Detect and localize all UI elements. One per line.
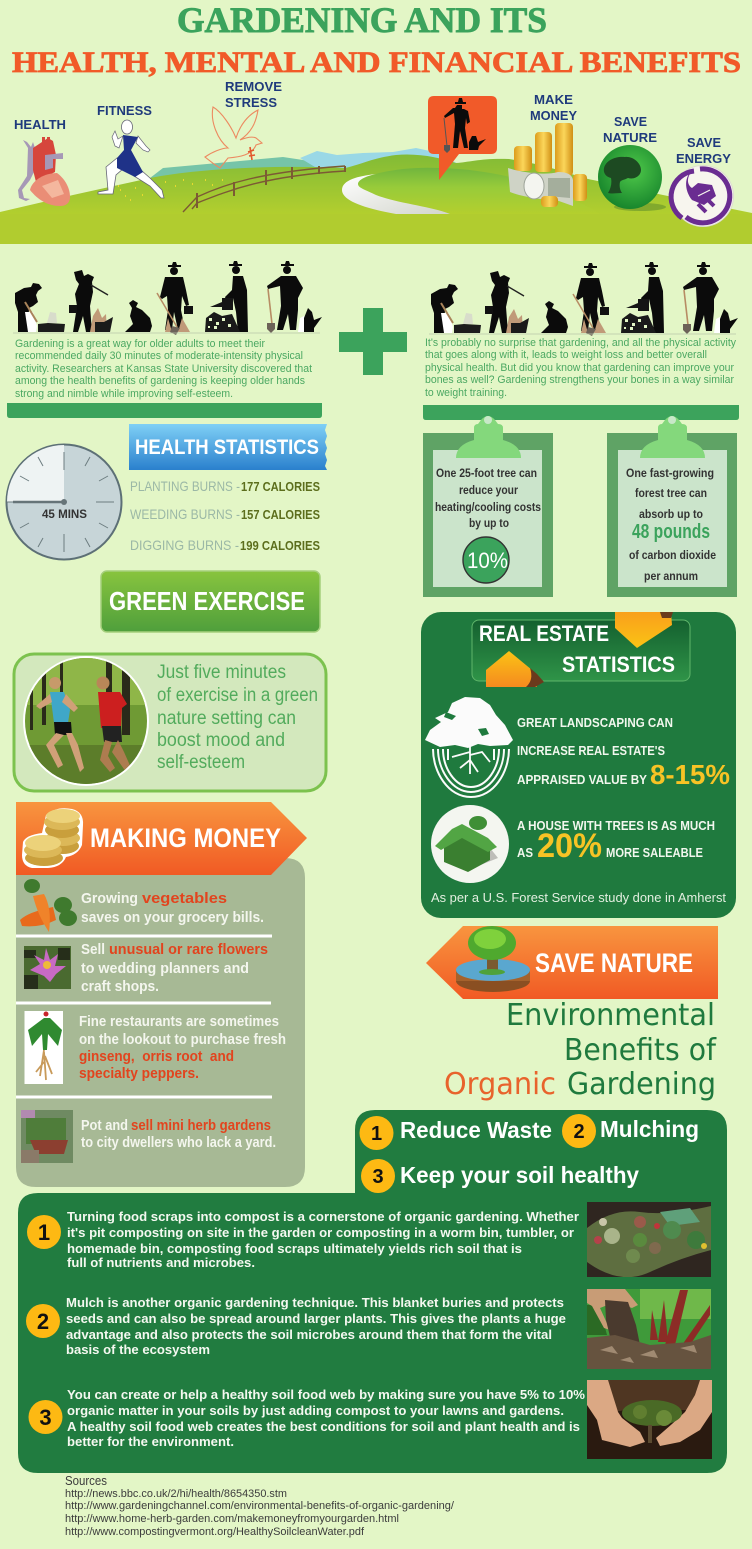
- clock 45 mins: [0, 444, 122, 560]
- text: five minutes: boost mood and: [157, 730, 285, 751]
- hero label: save energy: [676, 135, 731, 166]
- clipboard: carbon dioxide: absorb up to: [639, 507, 703, 521]
- text: five minutes: Just five minutes: [157, 662, 286, 683]
- save nature banner: [426, 926, 718, 999]
- icon: dove: [205, 107, 262, 168]
- step 1: compost: Turning food scraps into compost is a cornerstone of organic gardening. Whether: [67, 1209, 579, 1224]
- icon: green globe with tree: [598, 145, 666, 211]
- clipboard: carbon dioxide: One fast-growing: [626, 466, 714, 480]
- clock 45 mins: 45 MINS: [42, 507, 87, 521]
- clipboard: tree cooling: [423, 416, 553, 597]
- icon: tree on pond: [456, 926, 530, 992]
- sources: http://www.home-herb-garden.com/makemoneyfromyourgarden.html: [65, 1513, 399, 1525]
- summary list: 3: [372, 1166, 384, 1188]
- text: landscaping value: INCREASE REAL ESTATE'S: [517, 743, 665, 758]
- item: rare flowers: craft shops.: [81, 978, 159, 995]
- text: five minutes: [157, 662, 318, 773]
- plus sign: [339, 308, 407, 375]
- paragraph: older adults: [15, 338, 312, 400]
- item: vegetables: Growing: [81, 890, 138, 907]
- heading: environmental benefits of organic gardening: [444, 998, 717, 1102]
- paragraph: older adults: activity. Researchers at Kansas State University discovered that: [15, 363, 312, 375]
- summary list: 2: [573, 1121, 585, 1143]
- step 1: compost: homemade bin, composting food scraps ultimately yields rich soil that is: [67, 1241, 522, 1256]
- title line 2: HEALTH, MENTAL AND FINANCIAL BENEFITS: [12, 46, 741, 79]
- hero label: make money: MONEY: [530, 108, 577, 123]
- sources: [65, 1473, 455, 1538]
- item: rare flowers: [24, 941, 268, 995]
- green exercise button: GREEN EXERCISE: [109, 586, 305, 616]
- fence: [183, 166, 345, 212]
- text: five minutes: of exercise in a green: [157, 685, 318, 706]
- item: vegetables: saves on your grocery bills.: [81, 909, 264, 926]
- panel: organic gardening steps: [18, 1110, 727, 1473]
- health statistics banner: [129, 424, 327, 470]
- paragraph: older adults: strong and nimble while improving self-esteem.: [15, 388, 233, 400]
- heading: environmental benefits of organic gardening: Benefits of: [564, 1033, 717, 1068]
- text: house with trees: 20%: [537, 827, 602, 865]
- paragraph: bones: to weight training.: [425, 387, 507, 399]
- step 3: soil food web: You can create or help a healthy soil food web by making sure you have 5% to 10%: [67, 1387, 585, 1402]
- clipboard: carbon dioxide: of carbon dioxide: [629, 548, 716, 562]
- icon: coins and banknotes: [508, 123, 587, 207]
- text: five minutes: nature setting can: [157, 708, 296, 729]
- icon: grass house: [431, 805, 509, 883]
- summary list: Reduce Waste: [400, 1117, 552, 1143]
- divider: [16, 936, 272, 1097]
- hero label: save nature: [603, 114, 657, 145]
- hero label: make money: [530, 92, 577, 123]
- photo: planting: [587, 1380, 712, 1459]
- clipboard: tree cooling: 10%: [467, 548, 508, 573]
- clipboard: tree cooling: reduce your: [459, 483, 518, 497]
- clipboard: tree cooling: One 25-foot tree can: [436, 466, 537, 480]
- calorie stats: PLANTING BURNS -: [130, 478, 240, 494]
- hero label: remove stress: REMOVE: [225, 79, 282, 94]
- calorie stats: DIGGING BURNS -: [130, 537, 239, 553]
- step 1: compost: it's pit composting on site in the garden or composting in a worm bin, tumbler, or: [67, 1225, 574, 1240]
- green exercise button: [101, 571, 320, 632]
- gardener silhouettes left: [13, 261, 322, 335]
- item: ginseng: on the lookout to purchase fresh: [79, 1031, 286, 1048]
- clipboard: tree cooling: by up to: [469, 516, 509, 530]
- item: herb gardens: to city dwellers who lack a yard.: [81, 1134, 276, 1151]
- step 3: soil food web: better for the environment.: [67, 1434, 234, 1449]
- hero label: make money: MAKE: [534, 92, 573, 107]
- heading: environmental benefits of organic gardening: Environmental: [506, 998, 715, 1033]
- text: landscaping value: [517, 715, 730, 790]
- clipboard: carbon dioxide: [607, 416, 737, 597]
- step 3: soil food web: A healthy soil food web creates the best conditions for soil and plant health and is: [67, 1419, 580, 1434]
- icon: coin stacks: [22, 808, 83, 868]
- paragraph: bones: physical health. But did you know that gardening can improve your: [425, 362, 734, 374]
- text: house with trees: MORE SALEABLE: [606, 845, 703, 860]
- gardener silhouettes right: [429, 262, 738, 336]
- clipboard: tree cooling: heating/cooling costs: [435, 500, 541, 514]
- item: herb gardens: [21, 1110, 276, 1163]
- paragraph: bones: [425, 337, 736, 399]
- item: herb gardens: Pot and: [81, 1117, 128, 1134]
- photo: compost: [587, 1202, 711, 1277]
- health statistics banner: HEALTH STATISTICS: [135, 436, 319, 459]
- ribbon heading: [472, 612, 690, 687]
- sources: http://www.gardeningchannel.com/environmental-benefits-of-organic-gardening/: [65, 1500, 455, 1512]
- item: vegetables: [20, 879, 264, 932]
- item: ginseng: specialty peppers.: [79, 1065, 199, 1082]
- hero label: remove stress: STRESS: [225, 95, 277, 110]
- item: ginseng: Fine restaurants are sometimes: [79, 1013, 279, 1030]
- sources: Sources: [65, 1473, 107, 1488]
- calorie stats: 157 CALORIES: [241, 507, 320, 522]
- heading: environmental benefits of organic gardening: Gardening: [567, 1067, 716, 1102]
- text: five minutes: self-esteem: [157, 752, 245, 773]
- divider bar right: [423, 405, 739, 420]
- panel: green exercise: [14, 654, 326, 791]
- heading: making money: MAKING MONEY: [90, 823, 281, 853]
- item: vegetables: vegetables: [142, 890, 227, 907]
- photo: runners: [20, 655, 150, 786]
- making money banner: [16, 802, 307, 875]
- icon: runner: [98, 120, 164, 198]
- paragraph: bones: It's probably no surprise that gardening, and all the physical activity: [425, 337, 736, 349]
- step 3: soil food web: [28, 1380, 712, 1459]
- text: landscaping value: GREAT LANDSCAPING CAN: [517, 715, 673, 730]
- text: house with trees: A HOUSE WITH TREES IS AS MUCH: [517, 818, 715, 833]
- hero label: save energy: ENERGY: [676, 151, 731, 166]
- photo: mulch: [587, 1289, 711, 1369]
- calorie stats: 177 CALORIES: [241, 479, 320, 494]
- ribbon heading: REAL ESTATE: [479, 621, 609, 646]
- hero label: save energy: SAVE: [687, 135, 721, 150]
- hero label: fitness: FITNESS: [97, 103, 152, 118]
- item: rare flowers: to wedding planners and: [81, 960, 249, 977]
- summary list: [360, 1114, 699, 1193]
- sources: http://news.bbc.co.uk/2/hi/health/8654350.stm: [65, 1488, 287, 1500]
- step 3: soil food web: 3: [39, 1405, 52, 1430]
- summary list: 1: [371, 1123, 382, 1145]
- hero label: save nature: NATURE: [603, 130, 657, 145]
- step 2: mulch: seeds and can also be spread around larger plants. This gives the plants a huge: [66, 1311, 566, 1326]
- item: rare flowers: unusual or rare flowers: [109, 941, 268, 958]
- hero label: save nature: SAVE: [614, 114, 647, 129]
- road: [342, 174, 450, 214]
- item: herb gardens: sell mini herb gardens: [131, 1117, 271, 1134]
- step 2: mulch: Mulch is another organic gardening technique. This blanket buries and protects: [66, 1295, 564, 1310]
- divider bar left: [7, 403, 322, 418]
- heading: environmental benefits of organic gardening: Organic: [444, 1067, 556, 1102]
- item: ginseng: ginseng, orris root and: [79, 1048, 234, 1065]
- summary list: Keep your soil healthy: [400, 1162, 639, 1188]
- icon: white tree with roots: [425, 697, 513, 797]
- hero label: health: HEALTH: [14, 117, 66, 132]
- flower dots: [118, 180, 223, 200]
- summary list: Mulching: [600, 1116, 699, 1142]
- title: [12, 0, 741, 79]
- calorie stats: 199 CALORIES: [240, 538, 320, 553]
- paragraph: bones: that goes along with it, leads to weight loss and better overall: [425, 349, 707, 361]
- panel: making money: [16, 802, 307, 1187]
- step 1: compost: 1: [38, 1220, 50, 1245]
- panel: real estate statistics: [421, 612, 736, 918]
- calorie stats: [130, 478, 320, 553]
- save nature banner: SAVE NATURE: [535, 948, 693, 978]
- icon: purple plug: [671, 166, 734, 226]
- icon: gardener speech bubble: [428, 96, 497, 180]
- clipboard: carbon dioxide: per annum: [644, 569, 698, 583]
- step 2: mulch: basis of the ecosystem: [66, 1342, 210, 1357]
- text: landscaping value: APPRAISED VALUE BY: [517, 772, 647, 787]
- icon: heart: [18, 137, 70, 206]
- step 2: mulch: advantage and also protects the soil microbes around them that form the vital: [66, 1327, 552, 1342]
- landscape hero: [0, 148, 752, 244]
- step 2: mulch: [26, 1289, 711, 1369]
- step 1: compost: full of nutrients and microbes.: [67, 1255, 255, 1270]
- clipboard: carbon dioxide: forest tree can: [635, 486, 707, 500]
- text: house with trees: AS: [517, 845, 533, 860]
- paragraph: older adults: Gardening is a great way for older adults to meet their: [15, 338, 265, 350]
- paragraph: older adults: among the health benefits of gardening is keeping older hands: [15, 375, 305, 387]
- calorie stats: WEEDING BURNS -: [130, 506, 240, 522]
- hero label: remove stress: [225, 79, 282, 110]
- item: ginseng: [24, 1011, 286, 1084]
- ribbon heading: STATISTICS: [562, 652, 675, 677]
- sources: http://www.compostingvermont.org/HealthySoilcleanWater.pdf: [65, 1526, 365, 1538]
- text: landscaping value: 8-15%: [650, 759, 730, 790]
- paragraph: older adults: recommended daily 30 minutes of moderate-intensity physical: [15, 350, 303, 362]
- paragraph: bones: bones as well? Gardening strengthens your bones in a way similar: [425, 374, 734, 386]
- text: forest service note: As per a U.S. Forest Service study done in Amherst: [431, 890, 726, 905]
- title line 1: GARDENING AND ITS: [177, 0, 547, 40]
- step 1: compost: [27, 1202, 711, 1277]
- text: house with trees: [517, 818, 715, 865]
- step 3: soil food web: organic matter in your soils by just adding compost to your lawns and gardens.: [67, 1403, 564, 1418]
- clipboard: carbon dioxide: 48 pounds: [632, 521, 710, 543]
- step 2: mulch: 2: [37, 1309, 49, 1334]
- item: rare flowers: Sell: [81, 941, 105, 958]
